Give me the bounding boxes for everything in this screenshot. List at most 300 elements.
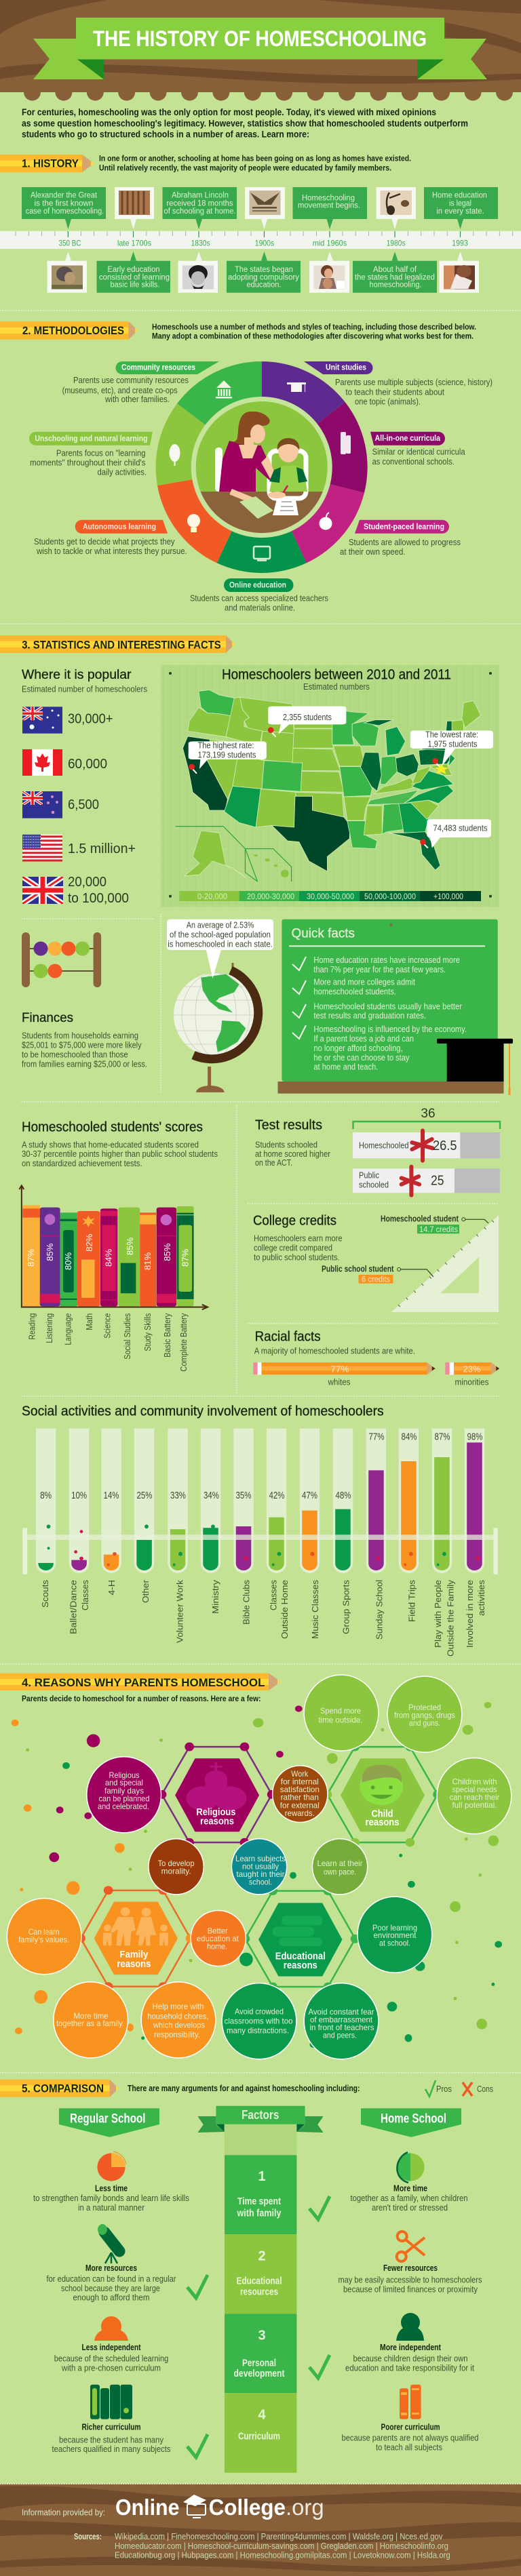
event: 350 BC: Alexander the Great [31,192,98,200]
header wood band [0,0,521,100]
row 2 left: more resources: enough to afford them [73,2293,149,2303]
fact list: no longer afford schooling, [313,1044,403,1053]
sources: Homeeducator.com | Homeschool-curriculum-savings.com | Gregladen.com | Homeschoolinfo.org [115,2541,448,2551]
bar: homeschooled [353,1130,500,1161]
scores heading and text: Homeschooled students' scores [22,1119,203,1134]
reason circle text: Children with [452,1777,497,1786]
timeline ruler: 1900s [255,239,274,248]
method: autonomous learning [34,520,187,556]
method: all-in-one curricula: as conventional schools. [372,457,455,467]
event: half of states: homeschooling. [369,281,422,290]
activity labels: Scouts [41,1580,50,1608]
fact list: Homeschooling is influenced by the economy. [313,1025,467,1034]
percent values: 8% [40,1490,52,1501]
percent values: 84% [402,1431,417,1442]
methodologies description: Many adopt a combination of these methodologies after discovering what works best for them. [152,332,474,340]
reason circle text: at school. [379,1939,410,1948]
event: 1993: in every state. [436,207,484,216]
reason circle text: for internal [281,1777,319,1786]
row 3 left: less independent: Less independent [81,2343,141,2352]
percent labels [26,1233,190,1270]
reason circle text: classrooms with too [224,2016,293,2025]
row 4 right: poorer curriculum: to teach all subjects [376,2442,442,2452]
fact list: Home education rates have increased more [313,955,460,965]
event: half of states: About half of [373,266,417,274]
percent values: 14% [103,1490,119,1501]
activity labels: Involved in more [465,1580,475,1648]
logo: OnlineCollege.org: College [209,2495,286,2520]
row 1 right: more time: aren't tired or stressed [372,2203,448,2213]
row 1 left: less time: to strengthen family bonds and learn life skills [33,2194,189,2203]
check marks [292,957,306,1039]
finances text [22,1011,147,1069]
reason circle text: Avoid crowded [235,2007,284,2017]
marker: homeschooled student: 14.7 credits [419,1226,458,1234]
section heading: 3. Statistics: 3. STATISTICS AND INTERESTING FACTS [22,639,221,652]
factor labels: Time spent [237,2196,281,2207]
panel: quick facts chalkboard [278,919,513,1095]
decorative bubbles [12,1702,502,2048]
row 4 right: poorer curriculum: because parents are not always qualified [342,2433,479,2442]
event: half of states [353,261,437,293]
icon: computer monitor [254,547,270,560]
reason circle text: and special [105,1778,143,1787]
row 4 left: richer curriculum: teachers qualified in many subjects [52,2444,171,2454]
reason circle text: together as a family. [56,2019,124,2028]
percent labels: 85% [45,1243,55,1261]
social activities heading: Social activities and community involvement of homeschoolers [22,1404,384,1419]
college credits: college credit compared [254,1244,332,1253]
reason circle text: satisfaction [280,1785,320,1794]
legend: pros and cons [425,2080,493,2097]
finances text: $25,001 to $75,000 were more likely [22,1041,142,1050]
row 1 right: more time: More time [393,2184,427,2194]
map legend [179,891,481,901]
section heading: 4. Reasons [0,1673,281,1690]
activity labels: Other [141,1580,151,1603]
reason circle text: which develops [153,2021,205,2030]
timeline ruler: 1993 [452,239,468,248]
fact list: than 7% per year for the past few years. [313,965,446,974]
row 2 right: fewer resources: because of limited finances or proximity [343,2285,478,2295]
fact list: homeschooled students. [313,987,396,997]
ACT scale: 36 [421,1107,436,1121]
history description [99,155,411,173]
fact list: More and more colleges admit [313,978,415,987]
method: online education [190,578,328,613]
photo: Abraham Lincoln [178,261,218,293]
event: 1830s: of schooling at home. [164,207,236,216]
flag: USA [22,835,62,861]
footer [0,2484,521,2576]
row 3 left: less independent: with a pre-chosen curriculum [61,2364,161,2373]
hexagon: child reasons [323,1743,442,1847]
reason circle text: Avoid constant fear [308,2007,374,2017]
reason circle text: rather than [281,1793,319,1802]
method: unit studies: to teach their students about [345,388,444,397]
factors column [197,2106,324,2473]
row 4 left: richer curriculum: Richer curriculum [81,2422,141,2432]
flag: Australia [22,707,62,734]
event: early education [96,261,170,293]
bar: homeschooled: Homeschooled [359,1141,409,1150]
methodology wheel [156,361,368,573]
photo: mother and child [309,261,349,293]
activity labels: Play with People [433,1580,443,1648]
legend: pros and cons: Pros [436,2084,452,2094]
bar: public schooled [353,1167,500,1195]
percent values: 87% [434,1431,450,1442]
scores heading and text: on standardized achievement tests. [22,1159,142,1168]
method: community resources: with other families. [104,395,170,404]
test results: on the ACT. [255,1158,292,1168]
activity labels: Ballet/Dance [69,1580,79,1634]
method: community resources: (museums, etc), and create co-ops [62,386,178,395]
timeline ruler: 350 BC [58,239,81,248]
event: 1830s [163,187,237,219]
percent labels: 81% [142,1252,153,1270]
chart: test tubes [22,1429,498,1657]
finances text: Students from households earning [22,1031,138,1040]
photo: Alexander [47,261,87,293]
ACT scale [353,1107,500,1129]
logo: OnlineCollege.org [115,2495,324,2520]
reason circle text: education at [197,1934,239,1943]
reason circle text: Learn at their [317,1859,362,1868]
activity labels: Volunteer Work [175,1579,185,1643]
callout text: 74,483 students [433,823,487,833]
hexagon category labels: Religious [196,1806,235,1818]
subject labels: Language [63,1313,73,1345]
section heading: 5. Comparison: 5. COMPARISON [22,2082,104,2095]
event: mid 1960s [293,187,367,219]
row 3 left: less independent [54,2316,168,2373]
row 2 left: more resources: for education can be found in a regular [46,2274,176,2284]
activity labels: Group Sports [341,1580,351,1634]
factors ribbon: Factors [242,2108,279,2122]
map legend: +100,000 [433,892,463,901]
activity labels: Music Classes [311,1580,320,1639]
icon: graduation cap [287,382,306,392]
pencil: whites 77% [253,1362,436,1374]
event: compulsory education [227,261,301,293]
factor labels: 2 [258,2248,266,2263]
fact list: he or she can choose to stay [313,1053,410,1063]
percent values: 48% [335,1490,351,1501]
reason circle text: Help more with [152,2002,204,2011]
flag: United Kingdom [22,877,63,904]
callout text: 2,355 students [283,713,332,722]
globe [167,919,273,1092]
percent values: 34% [204,1490,219,1501]
reason circle text: family days [104,1786,144,1796]
reason circle text: responsibility. [154,2029,200,2039]
event: 1830s: received 18 months [167,199,233,207]
race labels: 77% [331,1364,349,1374]
graduation cap [437,1039,513,1095]
test results: Students schooled [255,1140,317,1149]
sources: Sources: [74,2531,102,2541]
percent labels: 87% [180,1249,190,1267]
map pins [189,727,448,848]
race labels [331,1364,481,1374]
college credits: College credits [253,1214,336,1229]
callout text: 1,975 students [427,739,478,749]
factor labels: development [233,2368,285,2379]
choropleth states [176,690,481,881]
row 2 left: more resources: More resources [85,2263,137,2273]
legend: pros and cons: Cons [477,2084,493,2094]
factor labels: Educational [236,2275,282,2286]
subject labels: Math [85,1313,94,1330]
reason circle text: own pace. [324,1867,356,1876]
factor labels: resources [240,2286,278,2297]
intro text: For centuries, homeschooling was the only option for most people. Today, it's viewed with mixed opinions [22,107,436,117]
row 4 right: poorer curriculum [342,2385,479,2452]
racial facts: Racial facts [255,1329,321,1344]
reason circle text: To develop [158,1859,195,1868]
icon: light bulb [187,514,200,532]
hexagon: educational reasons [241,1886,360,1991]
racial facts: A majority of homeschooled students are white. [254,1347,415,1356]
percent values [40,1431,483,1501]
title: THE HISTORY OF HOMESCHOOLING [93,26,427,51]
marker: homeschooled student: Homeschooled student [381,1214,459,1224]
where it is popular [22,668,147,906]
event: early education: Early education [107,266,160,274]
hexagon category labels: Child [372,1808,393,1820]
section heading: 1. History: 1. HISTORY [22,157,79,170]
set square [391,1215,499,1312]
icon: green person [396,2313,424,2341]
pro check marks [187,2196,330,2457]
hexagon category labels: Family [119,1949,149,1960]
event: 1993: is legal [449,199,471,207]
scores heading and text: 30-37 percentile points higher than public school students [22,1149,218,1159]
reason circle text: environment [373,1930,417,1940]
title banner [33,18,487,79]
activity labels: Outside Home [280,1580,290,1639]
photo: 1900s [245,187,285,219]
reason circle text: time outside. [319,1716,362,1725]
method: student-paced learning: Students are allowed to progress [349,538,461,547]
percent values: 10% [71,1490,87,1501]
hexagon category labels: reasons [200,1816,234,1827]
row 2 right: fewer resources: may be easily accessible to homeschoolers [338,2276,482,2285]
method: community resources: Parents use community resources [73,376,189,385]
row 4 left: richer curriculum [52,2385,171,2454]
marker: public school student: 6 credits [362,1276,390,1284]
icon: orange clock [97,2152,126,2181]
finances text: from families earning $25,000 or less. [22,1059,147,1069]
bar: public schooled: 25 [431,1173,444,1188]
map legend: 30,000-50,000 [307,892,354,901]
scores heading and text [22,1119,218,1168]
timeline pointers [65,219,463,261]
panel: quick facts chalkboard: Quick facts [292,927,355,941]
method: student-paced learning [340,520,461,557]
percent labels: 84% [103,1249,114,1267]
method: autonomous learning: wish to tackle or what interests they pursue. [36,547,187,556]
icon: abacus [22,932,101,987]
comparison intro: There are many arguments for and against homeschooling including: [128,2084,360,2093]
icon: apple [319,513,332,530]
finances text: Finances [22,1011,73,1025]
row 1 left: less time: Less time [95,2184,128,2194]
value: USA: 1.5 million+ [68,841,136,856]
racial facts [253,1329,499,1387]
reason circle text: taught in their [236,1869,285,1879]
hexagon: family reasons [76,1886,195,1991]
column header: Regular School: Regular School [70,2112,145,2126]
racial facts: whites [328,1378,350,1387]
icon: green books [90,2385,132,2419]
value: New Zealand: 6,500 [68,797,99,812]
event: early education: basic life skills. [110,281,160,290]
fact list: If a parent loses a job and can [313,1034,414,1044]
event: compulsory education: adopting compulsory [228,273,299,281]
event: 350 BC: case of homeschooling. [26,207,104,216]
map callouts [189,707,493,848]
sources: Educationbug.org | Hubpages.com | Homeschooling.gomilpitas.com | Lovetoknow.com | Hslda.org [115,2550,450,2560]
race labels: 23% [463,1364,481,1374]
college credits [253,1214,499,1312]
icon: orange books [400,2385,421,2419]
activity labels: 4-H [107,1580,117,1596]
method: all-in-one curricula: Similar or identical curricula [372,448,465,457]
activity labels: Classes [81,1580,90,1610]
value: Australia: 30,000+ [68,712,113,727]
reason circle text: and guns. [409,1718,440,1728]
marker: homeschooled student [381,1214,488,1234]
row 2 right: fewer resources [338,2232,482,2295]
percent values: 25% [137,1490,152,1501]
reason circles [7,1675,512,2059]
timeline ruler: mid 1960s [313,239,347,248]
finances text: to be homeschooled than those [22,1050,128,1059]
section heading: 3. Statistics [0,635,235,653]
intro text: students who go to structured schools in a number of areas. Learn more: [22,129,309,140]
hexagon category labels: reasons [117,1958,151,1970]
fact list: Homeschooled students usually have better [313,1002,462,1011]
percent labels: 85% [162,1243,172,1261]
percent values: 98% [467,1431,483,1442]
activity labels: Classes [269,1580,278,1610]
method: all-in-one curricula [370,432,465,467]
factor labels: Curriculum [238,2430,280,2442]
panel: US map [161,665,499,907]
method: autonomous learning: Autonomous learning [83,522,156,532]
method: online education: and materials online. [225,603,295,613]
reason circle text: can be planned [99,1794,149,1803]
reason circle text: morality. [161,1867,191,1876]
factor labels: 1 [258,2169,266,2184]
method: unschooling and natural learning: moments" throughout their child's [30,458,145,468]
percent labels: 85% [125,1237,135,1255]
event: 1993: Home education [432,192,487,200]
bar: public schooled: schooled [359,1181,389,1190]
row 1 right: more time: together as a family, when children [350,2194,468,2203]
factor labels [233,2169,285,2442]
column header: Regular School [59,2108,159,2137]
scores heading and text: A study shows that home-educated students scored [22,1140,199,1149]
activity labels: Bible Clubs [242,1580,251,1625]
event: mid 1960s: Homeschooling [302,195,355,203]
fact list [313,955,467,1071]
event: compulsory education: The states began [235,266,293,274]
icon: books [341,432,351,454]
subject labels: Listening [45,1313,54,1343]
hexagon diagram shapes [7,1675,512,2059]
event: early education: consisted of learning [99,273,170,281]
method: student-paced learning: Student-paced learning [364,522,444,532]
callout text [198,713,487,833]
percent values: 77% [369,1431,384,1442]
college credits: Homeschoolers earn more [254,1234,343,1244]
globe callout: An average of 2.53% [187,920,254,930]
racial facts: minorities [455,1378,488,1387]
section heading: 2. Methodologies: 2. METHODOLOGIES [22,324,124,337]
timeline ruler: late 1700s [117,239,151,248]
callout text: 173,199 students [198,750,256,759]
percent labels: 82% [84,1233,94,1252]
reason circle text: rewards. [285,1808,315,1818]
section heading: 4. Reasons: 4. REASONS WHY PARENTS HOMESCHOOL [22,1676,265,1689]
value: United Kingdom: 20,000 [68,875,107,890]
test results [255,1107,500,1195]
photo: 1980s [376,187,416,219]
percent values: 33% [170,1490,186,1501]
reason circle text: and peers. [323,2031,357,2040]
activity labels [41,1579,486,1657]
marker: public school student: Public school student [322,1264,394,1273]
icon: tree [170,444,180,466]
hexagon category labels: reasons [365,1817,399,1828]
row 3 left: less independent: because of the scheduled learning [54,2354,168,2364]
pencil: minorities 23% [445,1362,499,1374]
methodologies description [152,323,476,340]
reason circle text: More time [73,2011,109,2021]
reason circle text: home. [207,1942,227,1951]
column header: Home School [361,2108,461,2137]
subject labels: Study Skills [143,1313,153,1351]
factor labels: 4 [258,2408,266,2423]
reason circle text: special needs [452,1785,497,1794]
row 2 left: more resources: school because they are large [61,2284,160,2293]
subject labels [27,1313,189,1372]
chalkboard shelf [278,1082,503,1094]
photo: girl writing [440,261,479,293]
bar chart: book scores [19,1185,208,1372]
photo: late 1700s [115,187,154,219]
percent labels: 87% [26,1249,36,1267]
reason circle text: Spend more [320,1706,361,1716]
section heading: 1. History [0,155,94,172]
percent values: 35% [236,1490,251,1501]
row 2 left: more resources [46,2224,176,2303]
method: all-in-one curricula: All-in-one curricula [374,433,440,443]
section heading: 5. Comparison [0,2080,119,2097]
factor labels: Personal [242,2357,276,2369]
activity labels: Field Trips [407,1580,417,1622]
where it is popular: Where it is popular [22,668,132,682]
factor labels: 3 [258,2329,266,2343]
hexagon category labels: Educational [275,1950,326,1962]
icon: museum [216,380,232,399]
row 2 right: fewer resources: Fewer resources [383,2263,438,2273]
map legend: 50,000-100,000 [364,892,416,901]
method: student-paced learning: at their own speed. [340,547,406,557]
